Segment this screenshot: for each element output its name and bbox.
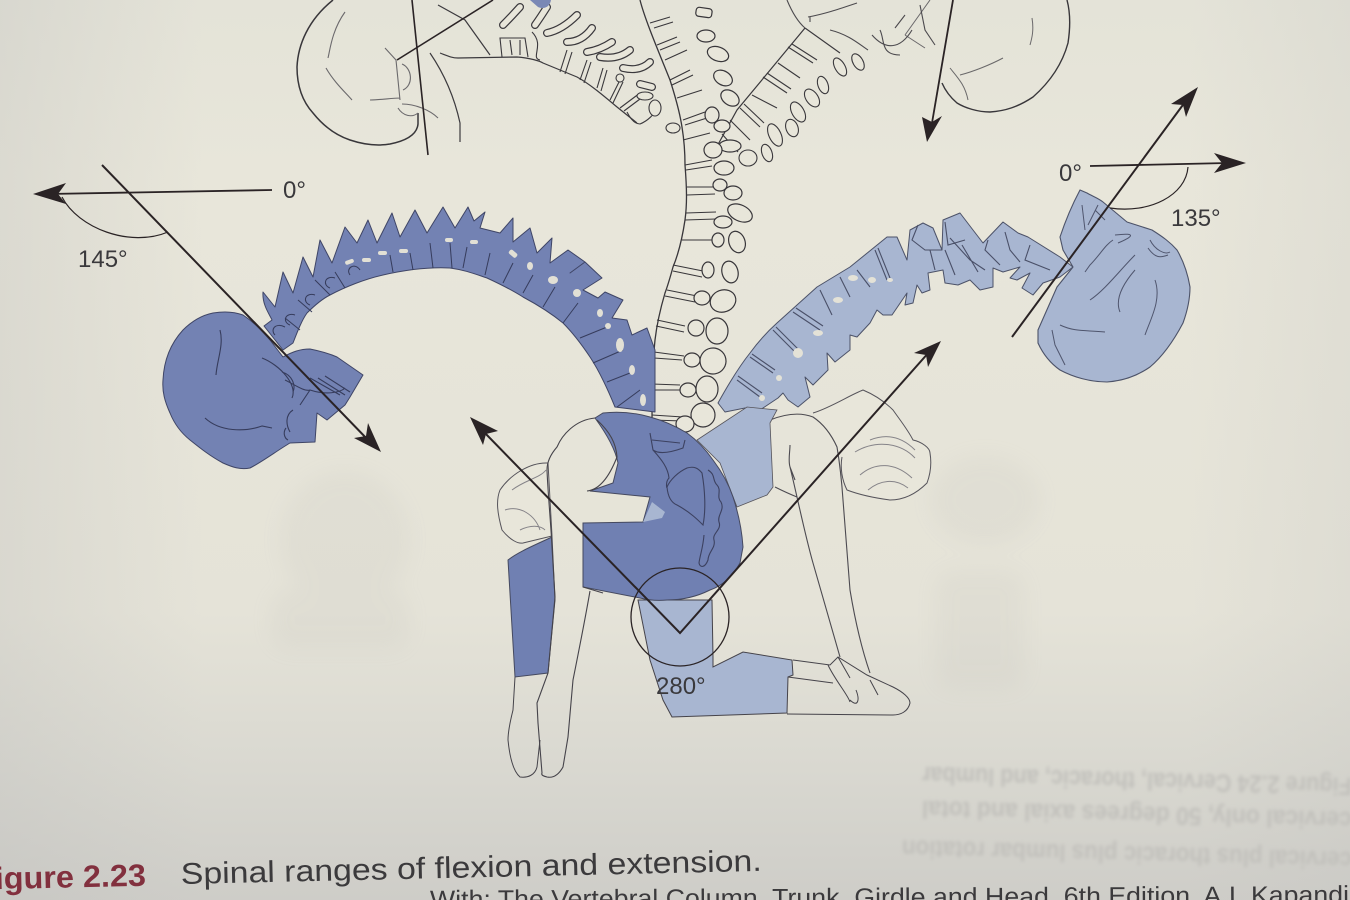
head axis arrow	[102, 165, 370, 442]
range circle	[631, 568, 729, 666]
kneeling figure	[498, 390, 931, 777]
upside-down show-through text from the facing page	[902, 761, 1350, 874]
top left flexed skull and spine	[297, 0, 680, 145]
angle arc	[1110, 167, 1188, 209]
skull detail	[1052, 205, 1170, 365]
extended figure torso, light blue	[697, 407, 777, 507]
skull outline, top left	[297, 0, 418, 145]
extended figure head and face	[813, 390, 931, 500]
spine silhouette	[718, 213, 1073, 412]
top right extended skull and spine	[715, 0, 1070, 166]
label: 135 degrees: 135°	[1171, 205, 1221, 232]
left spine disc lines	[285, 243, 640, 407]
top left vertical axis	[412, 0, 428, 155]
kneeling figure hair	[498, 463, 552, 543]
spine silhouette	[263, 207, 655, 412]
label: 280 degrees: 280°	[656, 673, 706, 700]
angle arc	[62, 197, 168, 238]
label: 0 degrees left: 0°	[283, 177, 306, 204]
baseline arrow	[1090, 163, 1228, 166]
show-through line 1: Figure 2.24 Cervical, thoracic, and lumbar	[921, 761, 1350, 800]
top blue tab	[530, 0, 551, 8]
angle labels	[78, 160, 1221, 700]
jaw and neck outline	[430, 5, 637, 142]
skull silhouette	[1038, 190, 1190, 382]
central white spine	[640, 0, 755, 432]
central process blobs	[676, 7, 755, 432]
head axis arrowhead	[354, 423, 381, 452]
baseline arrowhead	[33, 183, 66, 204]
top left spinous processes	[503, 7, 652, 87]
right skull, light blue	[1038, 190, 1190, 382]
top right arrow line	[932, 0, 953, 123]
top right arrowhead	[922, 116, 942, 142]
skull outline, top right	[942, 0, 1070, 112]
label: 145 degrees: 145°	[78, 246, 128, 273]
foot outline	[787, 657, 910, 715]
top arrows	[397, 0, 953, 155]
top right process blobs	[739, 52, 867, 166]
thigh and shin, light blue	[638, 600, 793, 717]
torso and pelvis, dark blue	[583, 412, 743, 600]
near arm outline	[537, 418, 617, 777]
top left vertebra stalks and joints	[500, 32, 660, 124]
left flexed spine, dark blue	[263, 207, 655, 412]
baseline arrowhead	[1214, 153, 1246, 173]
head axis arrow	[1012, 98, 1188, 337]
hand patch	[643, 502, 665, 522]
show-through line 3: cervical plus thoracic plus lumbar rotation	[902, 834, 1350, 874]
right spine white slots	[759, 275, 893, 401]
skull silhouette	[163, 312, 363, 469]
top right neck outline	[787, 0, 935, 55]
left flexion angle arrows	[33, 165, 381, 452]
left spine white slots	[345, 238, 646, 406]
central spine front edge	[640, 0, 686, 425]
near leg, dark blue	[508, 537, 555, 677]
right arrowhead	[914, 341, 941, 367]
show-through line 2: cervical only, 50 degrees axial and total	[922, 795, 1350, 834]
head axis arrowhead	[1171, 87, 1198, 117]
skull sutures and face detail	[205, 330, 350, 440]
baseline arrow	[48, 190, 272, 194]
hair strokes, left	[505, 470, 546, 530]
left skull, dark blue	[163, 312, 363, 469]
top right spine front edge	[715, 28, 805, 150]
near foot outline	[508, 677, 540, 777]
top right vertebra lines	[722, 28, 840, 152]
total range V arrows and circle	[470, 341, 941, 666]
sacrum scalloped edge	[699, 470, 722, 566]
V lines	[483, 351, 930, 633]
extended figure arm	[770, 414, 870, 673]
right spine disc lines	[737, 222, 1050, 397]
show-through shadows from the facing page	[270, 455, 1040, 690]
left spine joints	[273, 266, 360, 335]
right extended spine, light blue	[718, 213, 1073, 412]
caption line 1: Spinal ranges of flexion and extension.	[180, 845, 762, 891]
right extension angle arrows	[1012, 87, 1246, 337]
pelvis and sacrum outline	[650, 433, 705, 525]
label: 0 degrees right: 0°	[1059, 160, 1082, 187]
skull detail	[326, 12, 438, 118]
top left diagonal axis	[397, 0, 493, 60]
central disc lines	[650, 17, 716, 421]
left arrowhead	[470, 417, 498, 445]
top right skull detail	[905, 0, 1033, 100]
small lower blobs near the junction	[616, 74, 680, 133]
hair strokes, extended figure	[855, 437, 915, 490]
